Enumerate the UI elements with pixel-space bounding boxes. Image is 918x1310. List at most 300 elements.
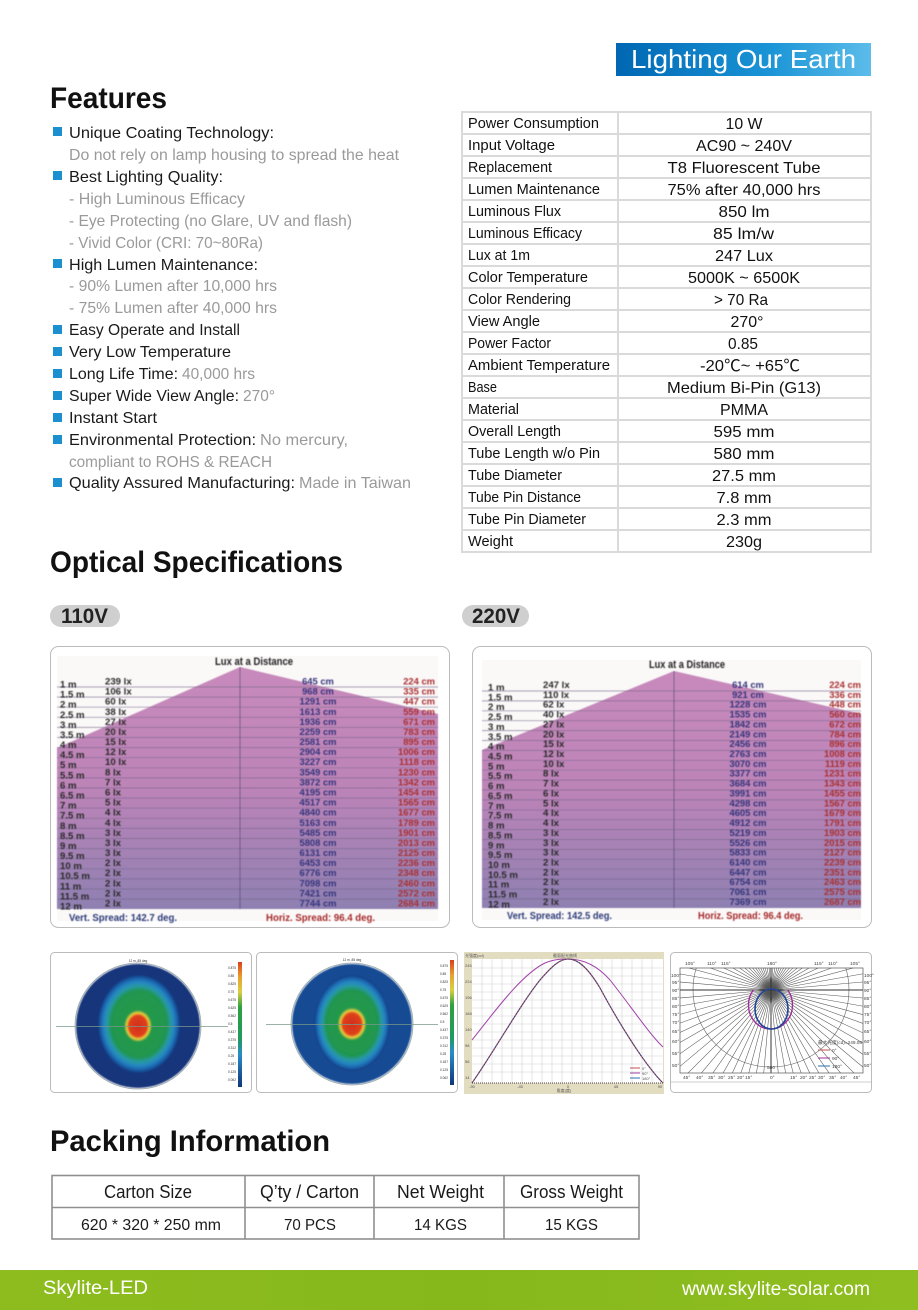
lux table values: 15 lx [543,739,565,750]
polar angle labels: 40° [696,1075,703,1081]
feature list text: Quality Assured Manufacturing: [69,475,295,492]
feature list text: Easy Operate and Install [69,322,240,339]
heat map caption: 12 m, 85 deg [129,959,148,963]
lux table values: 12 lx [105,747,127,758]
lux table values: Vert. Spread: 142.5 deg. [507,911,612,922]
spec values: 247 Lux [715,248,773,265]
lux table values: 7.5 m [60,811,85,822]
chart legend: 0° [642,1066,646,1071]
polar angle labels: 15° [745,1075,752,1081]
colour scale: 0.875 [228,966,236,970]
lux table values: 896 cm [829,738,861,749]
lux table values: 895 cm [403,736,435,747]
footer website: www.skylite-solar.com [681,1279,870,1300]
lux table values: 5.5 m [60,770,85,781]
feature list text: - 75% Lumen after 40,000 hrs [69,300,277,317]
polar legend [767,1039,862,1071]
spec labels: Color Temperature [468,270,588,286]
lux table values: 4 lx [105,808,122,819]
lux table values: 1 m [60,680,77,690]
polar angle labels: 65° [672,1029,679,1035]
spec labels: Weight [468,534,513,550]
spec values: 5000K ~ 6500K [688,270,800,287]
lux table values: 5 m [60,760,77,771]
polar angle labels: 30° [718,1075,725,1081]
badge: 220V: 220V [472,605,520,628]
lux table values: 2 lx [105,868,122,879]
chart labels: -90 [469,1084,476,1089]
lux table values: 2456 cm [729,738,767,749]
polar legend: 0° [832,1048,837,1054]
polar angle labels: 105° [685,961,695,967]
colour scale: 0.675 [228,998,236,1002]
lux table values: 2460 cm [398,877,435,888]
lux table values: 6131 cm [299,847,337,858]
feature list text: 270° [243,388,275,405]
lux table values: 2463 cm [824,876,861,887]
spec labels: Power Consumption [468,116,599,132]
feature list text: compliant to ROHS & REACH [69,454,272,471]
lux table values: 1842 cm [729,718,767,729]
spec values: Medium Bi-Pin (G13) [667,380,821,397]
lux table values: 60 lx [105,697,127,708]
lux table values: 2 lx [543,887,560,898]
lux table values: 2684 cm [398,897,435,908]
lux table values: 4 lx [105,818,122,829]
spec values: 75% after 40,000 hrs [668,182,820,199]
lux table values: 5526 cm [729,837,767,848]
colour scale: 0.5 [228,1022,233,1026]
lux table values: 5808 cm [299,837,337,848]
table: packing information [52,1176,639,1239]
polar angle labels: 75° [864,1012,871,1018]
spec values: > 70 Ra [714,292,768,309]
colour scale: 0.75 [228,990,234,994]
colour scale: 0.825 [228,982,236,986]
lux table values: 1 m [488,682,505,694]
colour scale: 0.062 [440,1076,448,1080]
polar angle labels: 110° [828,961,838,967]
badge: 110V [50,605,120,628]
lux table values: 1006 cm [398,746,435,757]
lux table values: 335 cm [403,686,435,697]
lux table values: 2.5 m [488,712,513,723]
spec labels: Luminous Efficacy [468,226,583,242]
spec labels: Overall Length [468,424,561,440]
polar angle labels: 80° [672,1004,679,1010]
polar angle labels: 50° [864,1063,871,1069]
lux table values: 10 lx [105,757,127,768]
lux table values: 2149 cm [729,728,767,739]
lux table values: 645 cm [302,676,334,686]
lux table values: 4.5 m [60,750,85,761]
colour scale: 0.062 [228,1078,236,1082]
lux table values: Vert. Spread: 142.7 deg. [69,913,177,924]
lux table values: 3549 cm [299,766,337,777]
lux table values: 6754 cm [729,876,767,887]
heading: Features: Features [50,82,167,115]
packing values: 70 PCS [284,1217,336,1234]
polar angle labels: 40° [840,1075,847,1081]
polar grid [680,968,863,1073]
lux table values: 2015 cm [824,837,861,848]
lux table values: 9 m [60,841,77,852]
lux table values: 10.5 m [60,871,90,882]
spec values: 0.85 [728,336,758,353]
polar legend: 90° [832,1056,839,1062]
lux table values: 7744 cm [299,897,337,908]
lux table values: Horiz. Spread: 96.4 deg. [698,911,803,922]
lux table values: 4605 cm [729,807,767,818]
polar angle labels: 55° [864,1051,871,1057]
polar angle labels: 20° [800,1075,807,1081]
lux table values: 9 m [488,840,505,851]
lux table values: 1.5 m [60,690,85,701]
lux table values: 5 lx [543,798,560,809]
table: product specifications [462,112,871,552]
lux table values: 4.5 m [488,752,513,763]
spec labels: Lux at 1m [468,248,530,264]
lux table values: 239 lx [105,676,132,688]
lux table values: 1118 cm [399,756,435,767]
banner: Lighting Our Earth: Lighting Our Earth [631,44,856,74]
chart labels [465,952,663,1093]
lux table values: 3 lx [543,848,560,859]
heading: Optical Specifications: Optical Specifications [50,546,343,579]
feature list text: - Vivid Color (CRI: 70~80Ra) [69,235,263,252]
lux table values: 1565 cm [398,797,435,808]
lux table values: Lux at a Distance [215,656,293,668]
lux table values: 1791 cm [824,817,861,828]
chart labels: 98 [465,1043,470,1048]
lux table values: 6 lx [543,788,560,799]
spec labels: Color Rendering [468,292,571,308]
chart legend [630,1066,651,1081]
chart labels: 140 [465,1027,472,1032]
polar angle labels: 115° [814,961,824,967]
lux table values: 5163 cm [299,817,337,828]
panel: intensity heat map 110V [50,952,252,1092]
lux table values: 3 lx [105,848,122,859]
feature list text: Very Low Temperature [69,344,231,361]
colour scale: 0.625 [440,1004,448,1008]
lux table values: 7 m [60,801,77,812]
lux table values: 3.5 m [60,730,85,741]
polar angle labels: 180° [767,961,777,967]
lux table values: 7098 cm [299,877,337,888]
footer brand: Skylite-LED [43,1278,148,1299]
lux table values [488,659,861,922]
spec labels: View Angle [468,314,540,330]
colour scale: 0.312 [228,1046,236,1050]
polar angle labels: 70° [672,1020,679,1026]
packing values [81,1217,598,1234]
feature list text [69,125,411,492]
lux table values: 11.5 m [60,891,89,902]
spec labels: Material [468,402,519,418]
polar curves [748,981,792,1029]
lux table values: 2 m [60,700,77,711]
lux table values: 1008 cm [824,748,861,759]
panel: intensity heat map 220V [256,952,458,1092]
chart labels: 224 [465,979,472,984]
panel: polar light distribution chart [670,952,874,1093]
lux table values: 3872 cm [299,776,337,787]
lux table values: 7 lx [105,777,122,788]
lux table values: 3.5 m [488,732,513,743]
lux table values: 1903 cm [824,827,861,838]
lux table values: 4 m [60,740,77,751]
lux table values: Horiz. Spread: 96.4 deg. [266,913,375,924]
lux table values: 448 cm [829,699,861,710]
lux table values: 106 lx [105,687,132,698]
spec values [667,116,821,551]
lux table values: 10 m [488,860,510,871]
lux table values: 4 m [488,742,505,753]
footer bar [0,1270,918,1310]
lux table values: 7 lx [543,779,560,790]
chart labels: 14 [465,1075,470,1080]
polar angle labels: 60° [864,1039,871,1045]
lux table values: 1.5 m [488,692,513,703]
lux table values: 10.5 m [488,870,518,881]
lux table values: 5 m [488,761,505,772]
lux table values: 3684 cm [729,778,767,789]
feature list text: - High Luminous Efficacy [69,191,245,208]
lux table values: 1455 cm [824,787,861,798]
lux table values: 2 lx [543,897,560,908]
polar angle labels: 75° [672,1012,679,1018]
spec labels: Base [468,380,497,396]
heat map caption: 12 m, 85 deg [343,958,362,962]
heading: Packing Information: Packing Information [50,1125,330,1158]
spec labels: Luminous Flux [468,204,562,220]
colour scale: 0.25 [228,1054,234,1058]
lux table values: 784 cm [829,728,861,739]
lux table values: 7369 cm [729,896,767,907]
colour scale: 0.125 [440,1068,448,1072]
spec labels [468,116,610,550]
colour scale: 0.75 [440,988,446,992]
feature list text: Made in Taiwan [299,475,411,492]
colour scale: 0.375 [228,1038,236,1042]
lux table values: 447 cm [403,696,435,707]
polar angle labels: 85° [672,996,679,1002]
feature list text: - Eye Protecting (no Glare, UV and flash) [69,213,352,230]
lux table values: 40 lx [543,710,565,721]
lux table values: 559 cm [403,706,435,717]
colour scale: 0.625 [228,1006,236,1010]
feature list text: 40,000 hrs [182,366,255,383]
lux table values: 8 lx [105,767,122,778]
lux table values [60,656,435,924]
spec labels: Tube Pin Diameter [468,512,586,528]
chart labels: 0 [567,1084,570,1089]
lux table values: 2013 cm [398,837,435,848]
lux table values: 2 lx [105,878,122,889]
spec values: 7.8 mm [716,490,772,507]
lux table values: 7 m [488,801,505,812]
feature list text: High Lumen Maintenance: [69,257,258,274]
lux table values: 110 lx [543,690,570,701]
lux table values: 1342 cm [398,776,435,787]
colour scale: 0.562 [440,1012,448,1016]
polar angle labels: 30° [818,1075,825,1081]
lux table values: 8.5 m [60,831,85,842]
lux table values: 8 m [488,821,505,832]
lux table values: 6.5 m [488,791,513,802]
lux table values: 6.5 m [60,790,85,801]
lux table values: 38 lx [105,707,127,718]
lux table values: 2 lx [543,867,560,878]
lux table values: 11 m [488,880,509,891]
feature list text: Long Life Time: [69,366,178,383]
lux table values: 2125 cm [398,847,435,858]
spec labels: Ambient Temperature [468,358,610,374]
spec values: 27.5 mm [712,468,776,485]
badge: 110V: 110V [61,605,108,628]
lux table values: 672 cm [829,718,861,729]
lux table values: 1535 cm [729,709,767,720]
polar angle labels: 25° [809,1075,816,1081]
lux table values: 4 lx [543,808,560,819]
lux table values: 20 lx [105,727,127,738]
lux table values: 15 lx [105,737,127,748]
lux table values: 2127 cm [824,847,861,858]
lux table values: 921 cm [732,689,764,700]
polar angle labels: 100° [864,973,874,979]
lux table values: 3377 cm [729,768,767,779]
lux table values: 247 lx [543,680,570,691]
lux cone chart [482,671,861,908]
lux table values: 6447 cm [729,866,767,877]
polar angle labels: 95° [672,980,679,986]
lux table values: 3227 cm [299,756,337,767]
colour scale: 0.187 [440,1060,448,1064]
lux table values: 5 lx [105,798,122,809]
polar angle labels: 65° [864,1029,871,1035]
feature list text: - 90% Lumen after 10,000 hrs [69,278,277,295]
polar angle labels: 15° [790,1075,797,1081]
lux table values: 4840 cm [299,807,337,818]
feature list text: Do not rely on lamp housing to spread the heat [69,147,400,164]
polar angle labels: 25° [728,1075,735,1081]
lux table values: 11 m [60,881,81,892]
colour scale: 0.562 [228,1014,236,1018]
feature list text: Instant Start [69,410,158,427]
spec values: 230g [726,534,762,551]
panel: light distribution curve chart [464,952,664,1094]
panel: features [50,82,411,492]
lux table values: 7.5 m [488,811,513,822]
lux table values: 4 lx [543,818,560,829]
feature list text: Best Lighting Quality: [69,169,223,186]
spec labels: Replacement [468,160,552,176]
packing values: 620 * 320 * 250 mm [81,1217,221,1234]
colour scale: 0.25 [440,1052,446,1056]
lux table values: 2687 cm [824,896,861,907]
lux table values: 27 lx [543,719,565,730]
spec labels: Tube Diameter [468,468,562,484]
lux table values: 1228 cm [729,699,767,710]
chart labels: 角度(度) [557,1087,572,1093]
polar angle labels: 50° [672,1063,679,1069]
chart labels: -45 [517,1084,524,1089]
packing column headers: Carton Size [104,1182,192,1202]
packing values: 14 KGS [414,1217,467,1234]
spec values: -20℃~ +65℃ [700,358,800,375]
chart labels: 90 [658,1084,663,1089]
lux table values: 10 lx [543,759,565,770]
lux table values: 10 m [60,861,82,872]
polar legend: 180° [832,1064,842,1070]
lux table values: 6776 cm [299,867,337,878]
lux cone chart [57,667,438,909]
lux table values: 2 lx [105,898,122,909]
lux table values: 6453 cm [299,857,337,868]
lux table values: 4195 cm [299,786,337,797]
polar angle labels: 110° [707,961,717,967]
spec values: PMMA [720,402,768,419]
polar angle labels: 35° [829,1075,836,1081]
colour scale: 0.875 [440,964,448,968]
lux table values: 6 lx [105,787,122,798]
lux table values: 3 lx [105,838,122,849]
colour scale: 0.187 [228,1062,236,1066]
lux table values: 9.5 m [60,851,85,862]
lux table values: 1789 cm [398,817,435,828]
lux table values: 1291 cm [299,696,337,707]
lux table values: 1679 cm [824,807,861,818]
lux table values: 2763 cm [729,748,767,759]
chart labels: 光强度(cd) [465,952,485,958]
lux table values: 224 cm [829,679,861,690]
lux table values: 1230 cm [398,766,435,777]
curves [472,959,663,1083]
lux table values: 3 m [60,720,77,731]
lux table values: 6 m [60,780,77,791]
colour scale: 0.125 [228,1070,236,1074]
lux table values: 5.5 m [488,771,513,782]
chart labels: 245 [465,963,472,968]
lux table values: 336 cm [829,689,861,700]
lux table values: 614 cm [732,679,764,690]
polar angle labels [671,961,874,1081]
lux table values: 1677 cm [398,807,435,818]
polar angle labels: 0° [770,1075,775,1081]
heat map disc [292,964,412,1084]
lux table values: 2259 cm [299,726,337,737]
spec values: 85 lm/w [713,226,774,243]
lux table values: 12 m [488,899,510,910]
chart labels: 168 [465,1011,472,1016]
lux table values: 1119 cm [825,758,861,769]
lux table values: 783 cm [403,726,435,737]
spec values: 270° [730,314,764,331]
polar angle labels: 90° [672,988,679,994]
lux table values: 2 m [488,702,505,713]
lux table values: 1613 cm [299,706,337,717]
colour scale: 0.437 [440,1028,448,1032]
lux table values: 12 lx [543,749,565,760]
polar angle labels: 45° [853,1075,860,1081]
colour scale: 0.5 [440,1020,445,1024]
polar angle labels: 115° [721,961,731,967]
lux table values: 2.5 m [60,710,85,721]
polar legend: 最大光度(cd)=249.08 [818,1039,862,1046]
packing column headers: Gross Weight [520,1182,623,1202]
spec values: 580 mm [714,446,774,463]
